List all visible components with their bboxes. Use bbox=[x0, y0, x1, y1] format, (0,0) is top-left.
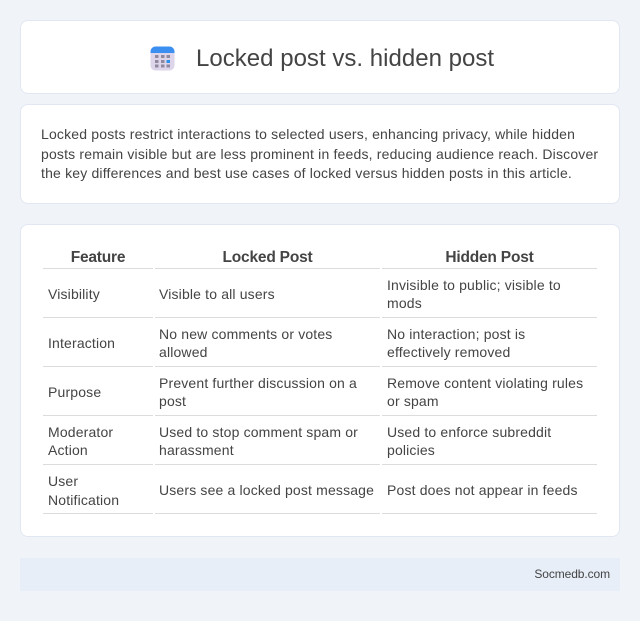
footer text: Socmedb.com bbox=[534, 567, 610, 581]
row: Purpose: Purpose bbox=[48, 384, 101, 400]
row: User Notification: Notification bbox=[48, 492, 119, 508]
row: Visibility: Visibility bbox=[48, 286, 100, 302]
panel: intro text card bbox=[20, 104, 620, 204]
header: Hidden Post: Hidden Post bbox=[445, 249, 534, 266]
comparison table: Users see a locked post message bbox=[159, 482, 374, 498]
comparison table: harassment bbox=[159, 442, 234, 458]
comparison table: Remove content violating rules bbox=[387, 375, 583, 391]
row: Interaction: Interaction bbox=[48, 335, 115, 351]
comparison table: Post does not appear in feeds bbox=[387, 482, 578, 498]
comparison table: policies bbox=[387, 442, 435, 458]
header: Feature: Feature bbox=[71, 249, 125, 266]
comparison table: No new comments or votes bbox=[159, 326, 332, 342]
intro text: posts remain visible but are less prominent in feeds, reducing audience reach. Discover bbox=[41, 146, 598, 162]
intro text bbox=[41, 126, 598, 181]
comparison table: post bbox=[159, 393, 186, 409]
comparison table: Used to enforce subreddit bbox=[387, 424, 551, 440]
row: User Notification: User bbox=[48, 473, 78, 489]
comparison table: Invisible to public; visible to bbox=[387, 277, 561, 293]
intro text: Locked posts restrict interactions to selected users, enhancing privacy, while hidden bbox=[41, 126, 575, 142]
comparison table: No interaction; post is bbox=[387, 326, 525, 342]
comparison table: Used to stop comment spam or bbox=[159, 424, 358, 440]
title: Locked post vs. hidden post bbox=[196, 45, 494, 72]
panel: title card bbox=[20, 20, 620, 94]
comparison table: Visible to all users bbox=[159, 286, 275, 302]
comparison table: Prevent further discussion on a bbox=[159, 375, 357, 391]
row: Moderator Action: Moderator bbox=[48, 424, 113, 440]
panel: comparison table card bbox=[20, 224, 620, 537]
row: Moderator Action bbox=[48, 424, 113, 458]
header: Locked Post: Locked Post bbox=[223, 249, 312, 266]
comparison table: effectively removed bbox=[387, 344, 510, 360]
icon: calendar bbox=[150, 46, 174, 70]
comparison table: allowed bbox=[159, 344, 208, 360]
footer bar bbox=[20, 558, 620, 591]
row: Moderator Action: Action bbox=[48, 442, 88, 458]
intro text: the key differences and best use cases of locked versus hidden posts in this article. bbox=[41, 165, 572, 181]
row: User Notification bbox=[48, 473, 119, 508]
comparison table: or spam bbox=[387, 393, 439, 409]
comparison table: mods bbox=[387, 295, 422, 311]
